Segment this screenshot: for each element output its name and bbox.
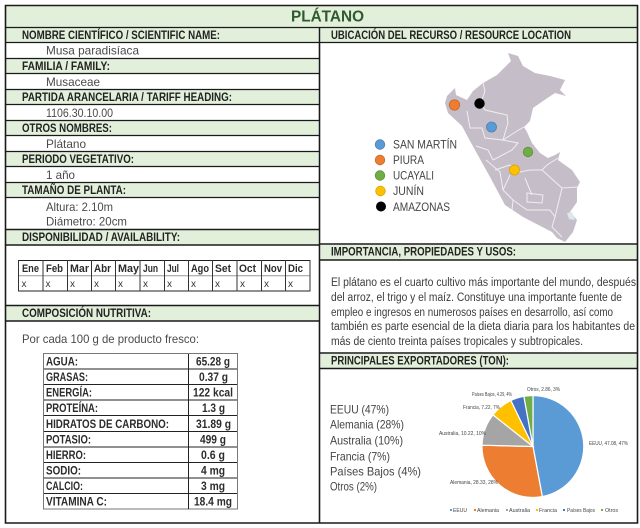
availability table: Feb [46, 263, 63, 275]
map legend: UCAYALI [393, 168, 434, 182]
availability table: Abr [94, 263, 112, 275]
pie legend [450, 508, 619, 514]
nutrition table [44, 354, 238, 509]
panel: datos generales: Altura: 2.10m [46, 200, 113, 214]
nutrition table: ENERGÍA: [46, 386, 92, 400]
title [6, 6, 638, 27]
availability table: Nov [264, 263, 283, 275]
map marker: Amazonas [474, 98, 485, 109]
pie legend: Francia [539, 508, 557, 514]
nutrition table: 0.37 g [199, 372, 228, 384]
panel: datos generales: PARTIDA ARANCELARIA / TARIFF HEADING: [22, 92, 232, 104]
map legend [375, 136, 457, 214]
nutrition table: AGUA: [46, 356, 78, 368]
pie legend: Alemania [477, 508, 499, 514]
nutrition table: SODIO: [46, 466, 81, 478]
availability table: x [118, 279, 123, 290]
panel: datos generales: FAMILIA / FAMILY: [22, 61, 110, 73]
availability table: x [288, 279, 293, 290]
nutrition table: 1.3 g [202, 403, 225, 415]
availability table: x [94, 279, 99, 290]
nutrition table: GRASAS: [46, 372, 88, 384]
panel: composición nutritiva [5, 306, 319, 509]
pie chart: Australia, 10.22, 10% [439, 431, 487, 437]
availability table: x [167, 279, 172, 290]
panel: datos generales [5, 27, 319, 228]
panel: datos generales: OTROS NOMBRES: [22, 123, 112, 135]
map marker: Ucayali [523, 147, 533, 157]
availability table: Ago [191, 263, 209, 275]
nutrition table: 0.6 g [201, 450, 225, 462]
exporters list: Australia (10%) [330, 434, 403, 448]
nutrition table: HIERRO: [46, 450, 86, 462]
map legend: SAN MARTÍN [393, 136, 457, 152]
availability table: Jul [167, 263, 179, 275]
nutrition table: 18.4 mg [194, 496, 232, 508]
map marker: Junín [510, 165, 520, 175]
nutrition table: POTASIO: [46, 434, 91, 446]
availability table: May [118, 263, 140, 275]
panel: composición nutritiva: Por cada 100 g de producto fresco: [22, 332, 199, 346]
panel: disponibilidad [5, 230, 319, 292]
availability table: x [191, 279, 196, 290]
map legend: JUNÍN [393, 183, 424, 198]
pie chart: Países Bajos, 4.29, 4% [472, 392, 512, 398]
map legend: PIURA [393, 153, 424, 167]
panel: datos generales: NOMBRE CIENTÍFICO / SCIENTIFIC NAME: [22, 29, 220, 42]
exporters list: Alemania (28%) [330, 418, 404, 432]
pie chart [439, 387, 629, 514]
pie chart: Francia, 7.22, 7% [463, 405, 501, 411]
availability table: Dic [288, 263, 303, 275]
paragraph [331, 277, 636, 348]
panel: datos generales: Musa paradisíaca [46, 44, 139, 58]
availability table [18, 260, 310, 292]
pie legend: Países Bajos [567, 508, 595, 514]
pie chart: EEUU, 47.08, 47% [589, 441, 629, 447]
nutrition table: 31.89 g [196, 419, 231, 431]
nutrition table: 65.28 g [196, 356, 230, 368]
panel: disponibilidad: DISPONIBILIDAD / AVAILABILITY: [22, 232, 180, 244]
availability table: x [22, 279, 26, 290]
availability table: x [264, 279, 269, 290]
panel: ubicación del recurso [319, 28, 638, 242]
panel: ubicación del recurso: UBICACIÓN DEL RECURSO / RESOURCE LOCATION [331, 29, 571, 42]
exporters list: Países Bajos (4%) [330, 464, 421, 478]
nutrition table: 122 kcal [193, 388, 233, 400]
map marker: Piura [449, 100, 460, 110]
pie legend: Australia [509, 508, 530, 514]
nutrition table: HIDRATOS DE CARBONO: [46, 419, 169, 431]
pie legend: Otros [605, 508, 619, 514]
panel: datos generales: Diámetro: 20cm [46, 214, 127, 228]
panel: importancia, propiedades y usos: IMPORTANCIA, PROPIEDADES Y USOS: [331, 246, 516, 258]
availability table: Jun [143, 263, 158, 275]
panel: datos generales: 1 año [46, 168, 75, 182]
map legend: AMAZONAS [393, 200, 450, 214]
availability table: Set [215, 263, 231, 275]
panel: principales exportadores [319, 353, 638, 514]
availability table: Mar [70, 263, 90, 275]
map marker: San Martín [486, 122, 496, 132]
map of Peru [445, 53, 580, 242]
nutrition table: 499 g [200, 434, 226, 446]
availability table: x [70, 279, 75, 290]
availability table: x [143, 279, 148, 290]
pie chart: Otros, 2.86, 3% [527, 387, 561, 393]
panel: datos generales: Musaceae [46, 75, 100, 89]
nutrition table: 3 mg [201, 481, 225, 493]
panel: principales exportadores: PRINCIPALES EXPORTADORES (TON): [331, 356, 509, 368]
exporters list: EEUU (47%) [330, 402, 389, 416]
nutrition table: 4 mg [201, 466, 225, 478]
nutrition table: VITAMINA C: [46, 496, 107, 508]
panel: datos generales: Plátano [46, 137, 86, 151]
availability table: x [46, 279, 50, 290]
paragraph: más de ciento treinta países tropicales y subtropicales. [331, 336, 583, 348]
availability table: x [240, 279, 245, 290]
panel: datos generales: PERIODO VEGETATIVO: [22, 154, 134, 166]
availability table: Oct [239, 263, 256, 275]
title: PLÁTANO [291, 6, 364, 26]
exporters list: Otros (2%) [330, 480, 377, 494]
exporters list [330, 402, 421, 494]
availability table: x [215, 279, 220, 290]
pie legend: EEUU [453, 508, 467, 514]
nutrition table: CALCIO: [46, 481, 83, 493]
pie chart: Alemania, 28.33, 28% [450, 480, 499, 486]
panel: datos generales: 1106.30.10.00 [46, 106, 113, 120]
panel: importancia, propiedades y usos [319, 244, 638, 348]
exporters list: Francia (7%) [330, 450, 390, 464]
availability table: Ene [22, 263, 39, 275]
panel: datos generales: TAMAÑO DE PLANTA: [22, 184, 126, 197]
panel: composición nutritiva: COMPOSICIÓN NUTRITIVA: [22, 307, 151, 320]
nutrition table: PROTEÍNA: [46, 402, 98, 415]
